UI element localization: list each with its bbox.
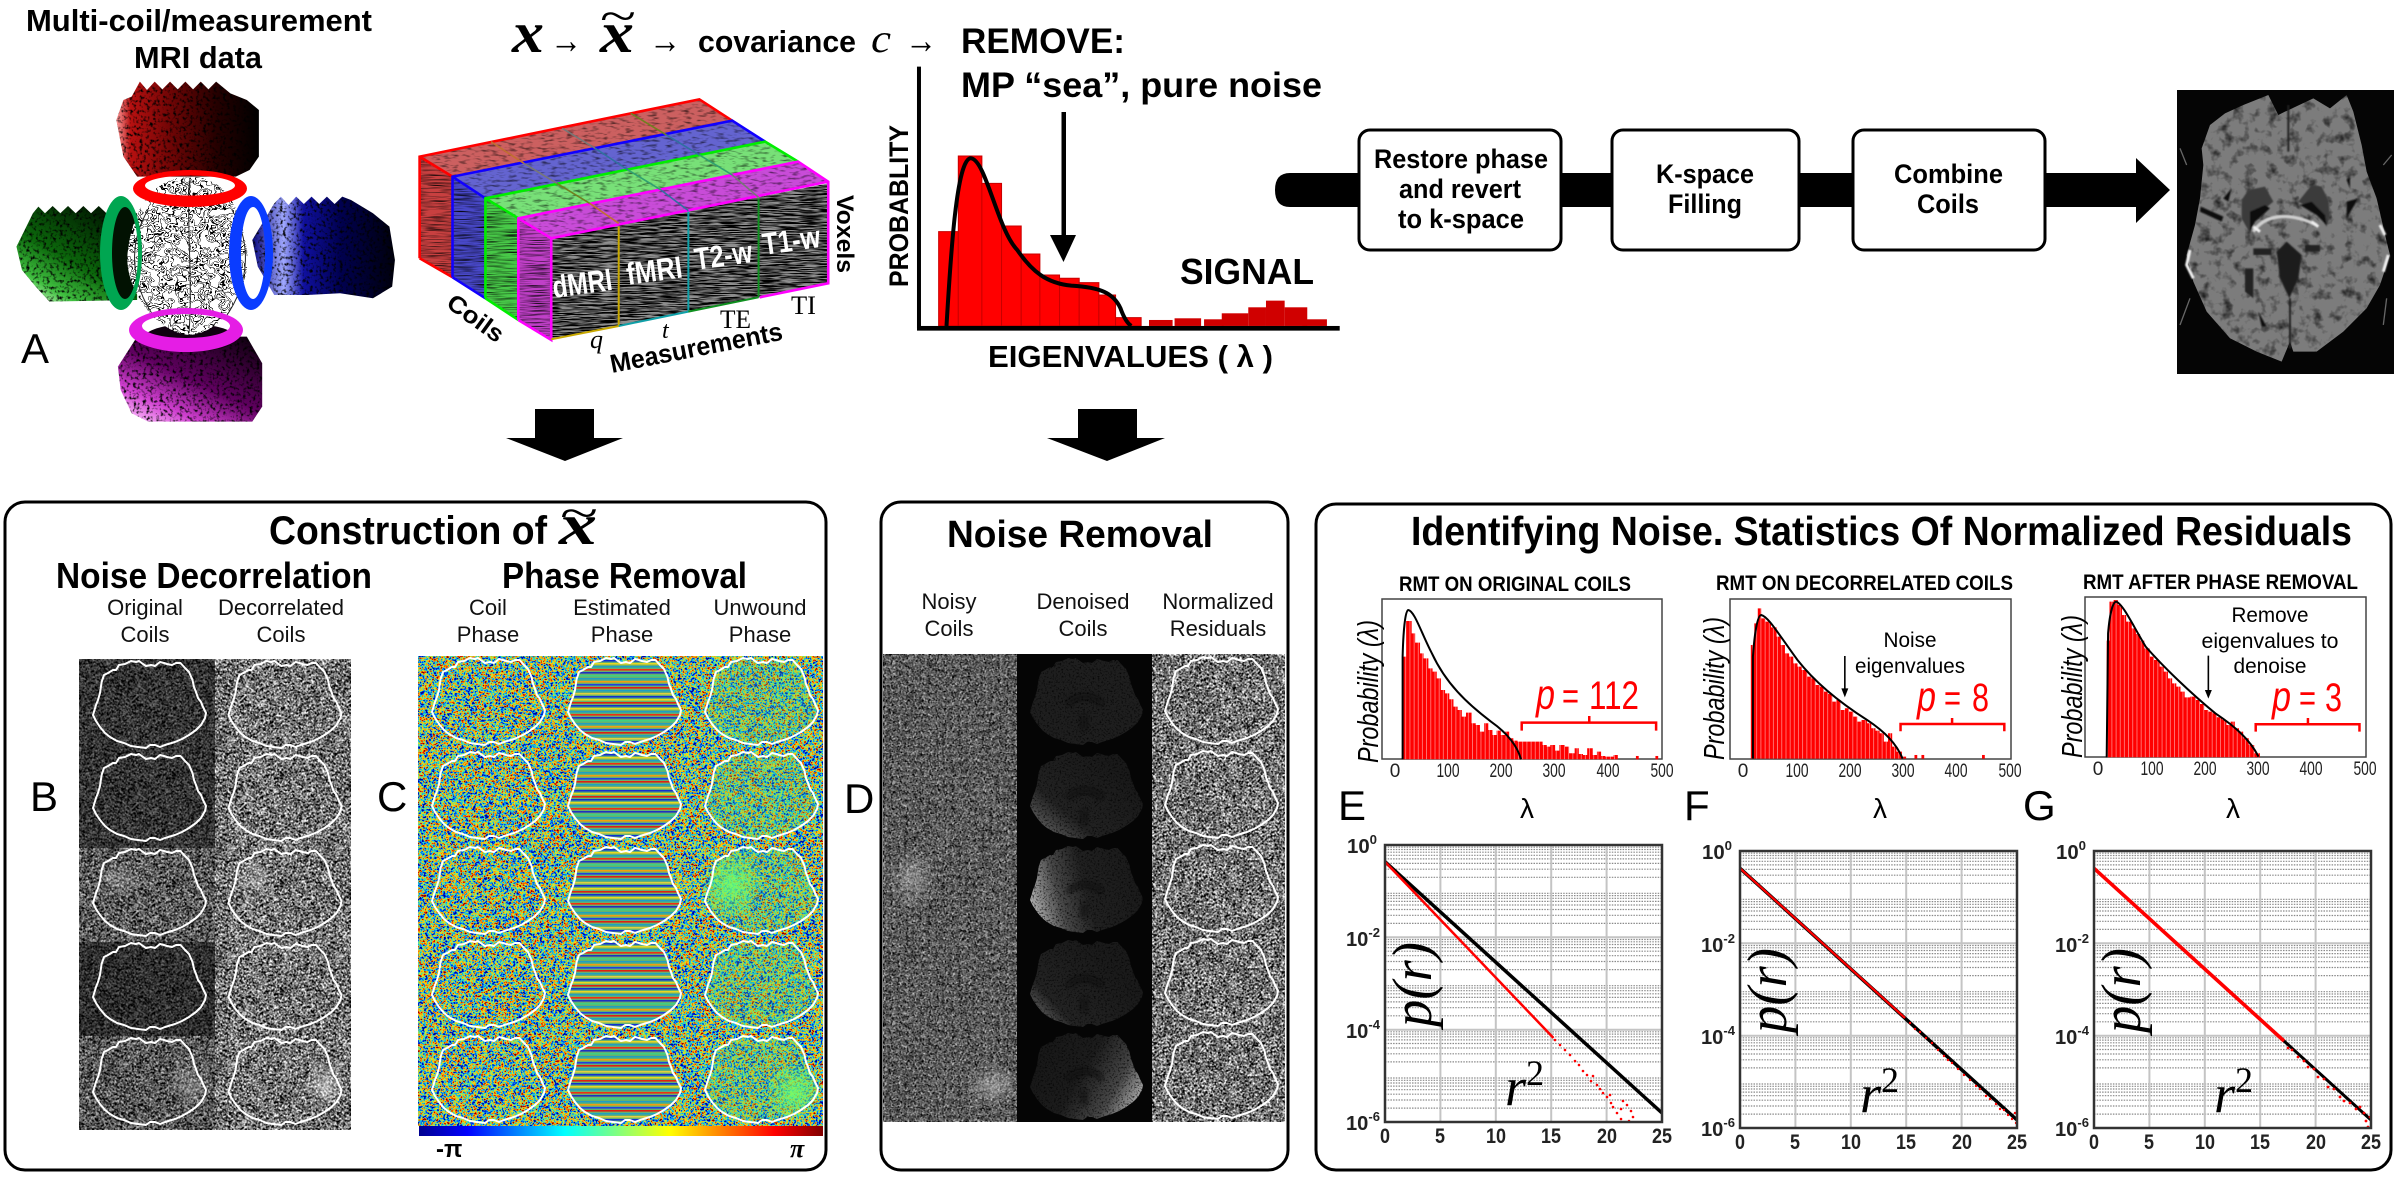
histogram: RMT after phase removal: eigenvalues to	[2202, 630, 2338, 653]
chart: eigenvalue histogram with MP curve: EIGENVALUES ( λ )	[988, 339, 1273, 374]
box: combine coils: Combine	[1894, 159, 2003, 189]
histogram: RMT on original coils: 300	[1542, 761, 1566, 782]
label B: B	[30, 773, 58, 820]
panel: noise removal	[881, 502, 1288, 1170]
panel: identifying noise	[1316, 504, 2391, 1170]
histogram: RMT on original coils: 100	[1436, 761, 1460, 782]
histogram: RMT on original coils: =	[1562, 676, 1579, 718]
log plot F: 10	[1702, 842, 1724, 864]
log plot E: 10	[1347, 836, 1369, 858]
data cube: coils, voxels, measurements: Measurements	[607, 316, 785, 379]
lambda axis label 2: λ	[1873, 793, 1887, 824]
histogram: RMT after phase removal: =	[2299, 678, 2316, 720]
histogram: RMT on original coils: 112	[1589, 674, 1639, 718]
equation: data to covariance: →	[649, 20, 681, 62]
equation: data to covariance: c	[871, 16, 891, 61]
chart: eigenvalue histogram with MP curve	[884, 67, 1340, 374]
histogram: RMT on decorrelated coils: eigenvalues	[1855, 655, 1965, 678]
histogram: RMT after phase removal: 400	[2300, 759, 2322, 780]
log plot E: 15	[1541, 1125, 1561, 1148]
log plot G: 10	[2056, 842, 2078, 864]
data cube: coils, voxels, measurements: fMRI	[624, 249, 684, 292]
data cube: coils, voxels, measurements: T1-w	[760, 219, 823, 262]
heading: phase removal: Phase Removal	[502, 555, 747, 596]
column labels: decorrelation: Coils	[121, 622, 169, 647]
data cube: coils, voxels, measurements: T2-w	[692, 234, 755, 277]
log plot E: 10	[1346, 1021, 1368, 1043]
log plot G: r	[2214, 1064, 2236, 1124]
equation: data to covariance	[511, 0, 937, 65]
log plot G: 0	[2089, 1131, 2099, 1154]
histogram: RMT on decorrelated coils	[1699, 572, 2022, 782]
heading: remove MP sea	[961, 22, 1322, 105]
data cube: coils, voxels, measurements: TI	[791, 291, 816, 320]
histogram: RMT on original coils: p	[1534, 671, 1555, 718]
histogram: RMT on decorrelated coils: Probability (λ)	[1699, 617, 1731, 760]
histogram: RMT on original coils: 500	[1650, 761, 1674, 782]
image: noisy coils	[883, 654, 1019, 1122]
arrow: down to construction	[506, 409, 623, 461]
box: restore phase	[1359, 130, 1561, 250]
log plot G: p(r)	[2091, 948, 2153, 1037]
log plot G: 10	[2055, 1119, 2077, 1141]
data cube: coils, voxels, measurements	[420, 99, 858, 379]
lambda axis label 1: λ	[1520, 793, 1534, 824]
log plot G: 0	[2079, 838, 2086, 853]
panel title: x	[558, 492, 597, 557]
column labels: decorrelation	[107, 595, 344, 647]
column labels: decorrelation: Decorrelated	[218, 595, 344, 620]
label F: F	[1684, 782, 1710, 829]
histogram: RMT on decorrelated coils: Noise	[1884, 629, 1936, 652]
box: k-space filling: Filling	[1668, 189, 1742, 219]
column labels: Coils	[925, 616, 973, 641]
log plot E: -4	[1368, 1017, 1381, 1032]
data cube: coils, voxels, measurements: TE	[720, 305, 751, 334]
heading: multi-coil data	[26, 3, 372, 75]
data cube: coils, voxels, measurements: dMRI	[550, 262, 614, 305]
column labels: phase: Estimated	[573, 595, 671, 620]
log plot E: 20	[1597, 1125, 1617, 1148]
histogram: RMT after phase removal: 300	[2246, 759, 2270, 780]
lambda axis label 3: λ	[2226, 793, 2240, 824]
log plot E	[1346, 832, 1672, 1148]
histogram: RMT on decorrelated coils: 200	[1838, 761, 1862, 782]
log plot E: 25	[1652, 1125, 1672, 1148]
histogram: RMT on decorrelated coils: 100	[1786, 761, 1808, 782]
log plot F: 2	[1881, 1060, 1899, 1100]
histogram: RMT on original coils	[1353, 573, 1674, 782]
log plot G: -2	[2077, 931, 2089, 946]
column labels: phase: Phase	[729, 622, 791, 647]
log plot G: 2	[2235, 1060, 2253, 1100]
panel: construction of x tilde	[5, 487, 826, 1170]
column labels: Normalized	[1162, 589, 1274, 614]
column labels: phase: Phase	[457, 622, 519, 647]
histogram: RMT on decorrelated coils: =	[1944, 678, 1961, 720]
histogram: RMT after phase removal: 500	[2354, 759, 2376, 780]
histogram: RMT after phase removal: Probability (λ)	[2057, 615, 2089, 758]
histogram: RMT after phase removal	[2057, 571, 2376, 780]
panel title: ~	[560, 487, 598, 538]
log plot F: 10	[1701, 1119, 1723, 1141]
column labels: phase	[457, 595, 806, 647]
histogram: RMT after phase removal: 3	[2325, 676, 2342, 720]
image: normalized residuals	[1152, 654, 1285, 1122]
equation: data to covariance: x	[511, 0, 544, 65]
log plot E: r	[1505, 1057, 1527, 1117]
log plot F: 5	[1790, 1131, 1800, 1154]
box: restore phase: to k-space	[1398, 204, 1524, 234]
log plot E: 10	[1486, 1125, 1506, 1148]
log plot F: 0	[1725, 838, 1732, 853]
log plot E: 10	[1346, 929, 1368, 951]
histogram: RMT after phase removal: 0	[2093, 759, 2103, 780]
log plot F: -2	[1723, 931, 1735, 946]
box: restore phase: and revert	[1399, 174, 1521, 204]
icon: head coil array with brain	[16, 82, 395, 422]
image: denoised coils	[1017, 654, 1152, 1122]
log plot E: 2	[1526, 1053, 1544, 1093]
histogram: RMT on original coils: 400	[1596, 761, 1620, 782]
label D: D	[844, 775, 874, 822]
histogram: RMT after phase removal: Remove	[2232, 604, 2308, 627]
log plot G: -4	[2077, 1023, 2090, 1038]
histogram: RMT after phase removal: 200	[2194, 759, 2216, 780]
log plot E: p(r)	[1382, 942, 1444, 1031]
log plot G	[2055, 838, 2381, 1154]
log plot G: -6	[2077, 1115, 2089, 1130]
label E: E	[1338, 782, 1366, 829]
label A: A	[21, 325, 49, 372]
equation: data to covariance: x	[599, 0, 634, 65]
column labels: Noisy	[921, 589, 977, 614]
heading: multi-coil data: MRI data	[134, 40, 263, 75]
box: combine coils: Coils	[1917, 189, 1979, 219]
histogram: RMT on decorrelated coils: 400	[1944, 761, 1968, 782]
histogram: RMT on decorrelated coils: 0	[1738, 761, 1748, 782]
histogram: RMT on original coils: 0	[1390, 761, 1400, 782]
log plot G: 10	[2195, 1131, 2215, 1154]
heading: multi-coil data: Multi-coil/measurement	[26, 3, 372, 38]
histogram: RMT after phase removal: p	[2270, 673, 2291, 720]
panel title: Noise Removal	[947, 514, 1213, 556]
column labels: decorrelation: Original	[107, 595, 183, 620]
log plot E: 0	[1370, 832, 1377, 847]
column labels: Residuals	[1170, 616, 1266, 641]
equation: data to covariance: covariance	[698, 24, 856, 59]
histogram: RMT on decorrelated coils: 500	[1998, 761, 2022, 782]
image: final denoised brain	[2177, 90, 2394, 374]
box: k-space filling	[1612, 130, 1799, 250]
histogram: RMT on original coils: Probability (λ)	[1353, 620, 1385, 763]
data cube: coils, voxels, measurements: Voxels	[831, 195, 858, 273]
histogram: RMT after phase removal: 100	[2140, 759, 2164, 780]
column labels: phase: Phase	[591, 622, 653, 647]
log plot F: 15	[1896, 1131, 1916, 1154]
equation: data to covariance: →	[550, 20, 582, 62]
box: combine coils	[1853, 130, 2045, 250]
heading: noise decorrelation: Noise Decorrelation	[56, 555, 372, 596]
column labels: decorrelation: Coils	[257, 622, 305, 647]
log plot F: 25	[2007, 1131, 2027, 1154]
column labels	[921, 589, 1274, 641]
histogram: RMT on decorrelated coils: 8	[1972, 676, 1989, 720]
histogram: RMT on original coils: 200	[1490, 761, 1512, 782]
histogram: RMT on original coils: RMT ON ORIGINAL COILS	[1399, 573, 1631, 596]
log plot F: -6	[1723, 1115, 1735, 1130]
data cube: coils, voxels, measurements: Coils	[441, 289, 509, 348]
log plot G: 10	[2055, 1027, 2077, 1049]
chart: eigenvalue histogram with MP curve: PROBABLITY	[884, 125, 914, 287]
colorbar	[419, 1126, 823, 1163]
data cube: coils, voxels, measurements: q	[590, 325, 603, 354]
histogram: RMT after phase removal: denoise	[2234, 655, 2306, 678]
log plot F: r	[1860, 1064, 1882, 1124]
histogram: RMT on decorrelated coils: RMT ON DECORRELATED COILS	[1716, 572, 2013, 595]
box: restore phase: Restore phase	[1374, 144, 1548, 174]
log plot F	[1701, 838, 2027, 1154]
log plot E: -2	[1368, 925, 1380, 940]
arrow: MP sea pointer	[1050, 112, 1076, 262]
log plot F: 0	[1735, 1131, 1745, 1154]
panel title: Construction of	[269, 509, 548, 553]
image: original and decorrelated coils	[79, 659, 351, 1130]
log plot F: 10	[1701, 1027, 1723, 1049]
arrow: down to noise removal	[1047, 409, 1165, 461]
log plot F: 10	[1701, 935, 1723, 957]
histogram: RMT after phase removal: RMT AFTER PHASE REMOVAL	[2083, 571, 2358, 594]
equation: data to covariance: →	[905, 20, 937, 62]
log plot E: -6	[1368, 1109, 1380, 1124]
panel title	[269, 487, 598, 557]
chart: eigenvalue histogram with MP curve: SIGNAL	[1180, 251, 1314, 292]
log plot F: 20	[1952, 1131, 1972, 1154]
label G: G	[2023, 782, 2056, 829]
log plot E: 10	[1346, 1113, 1368, 1135]
log plot F: p(r)	[1737, 948, 1799, 1037]
column labels: Denoised	[1037, 589, 1129, 614]
column labels: phase: Coil	[469, 595, 507, 620]
heading: remove MP sea: REMOVE:	[961, 22, 1125, 61]
histogram: RMT on decorrelated coils: 300	[1892, 761, 1914, 782]
log plot E: 5	[1435, 1125, 1445, 1148]
column labels: Coils	[1059, 616, 1107, 641]
box: k-space filling: K-space	[1656, 159, 1754, 189]
colorbar: π	[790, 1134, 805, 1163]
pipeline arrow	[1275, 158, 2170, 223]
colorbar: -π	[436, 1136, 462, 1163]
log plot G: 5	[2144, 1131, 2154, 1154]
log plot F: 10	[1841, 1131, 1861, 1154]
histogram: RMT on decorrelated coils: p	[1915, 673, 1936, 720]
log plot G: 25	[2361, 1131, 2381, 1154]
image: phase maps	[418, 656, 823, 1126]
column labels: phase: Unwound	[714, 595, 806, 620]
log plot E: 0	[1380, 1125, 1390, 1148]
log plot G: 15	[2250, 1131, 2270, 1154]
heading: remove MP sea: MP “sea”, pure noise	[961, 66, 1322, 105]
log plot G: 20	[2306, 1131, 2326, 1154]
data cube: coils, voxels, measurements: t	[662, 318, 670, 344]
log plot G: 10	[2055, 935, 2077, 957]
label C: C	[377, 773, 407, 820]
log plot F: -4	[1723, 1023, 1736, 1038]
